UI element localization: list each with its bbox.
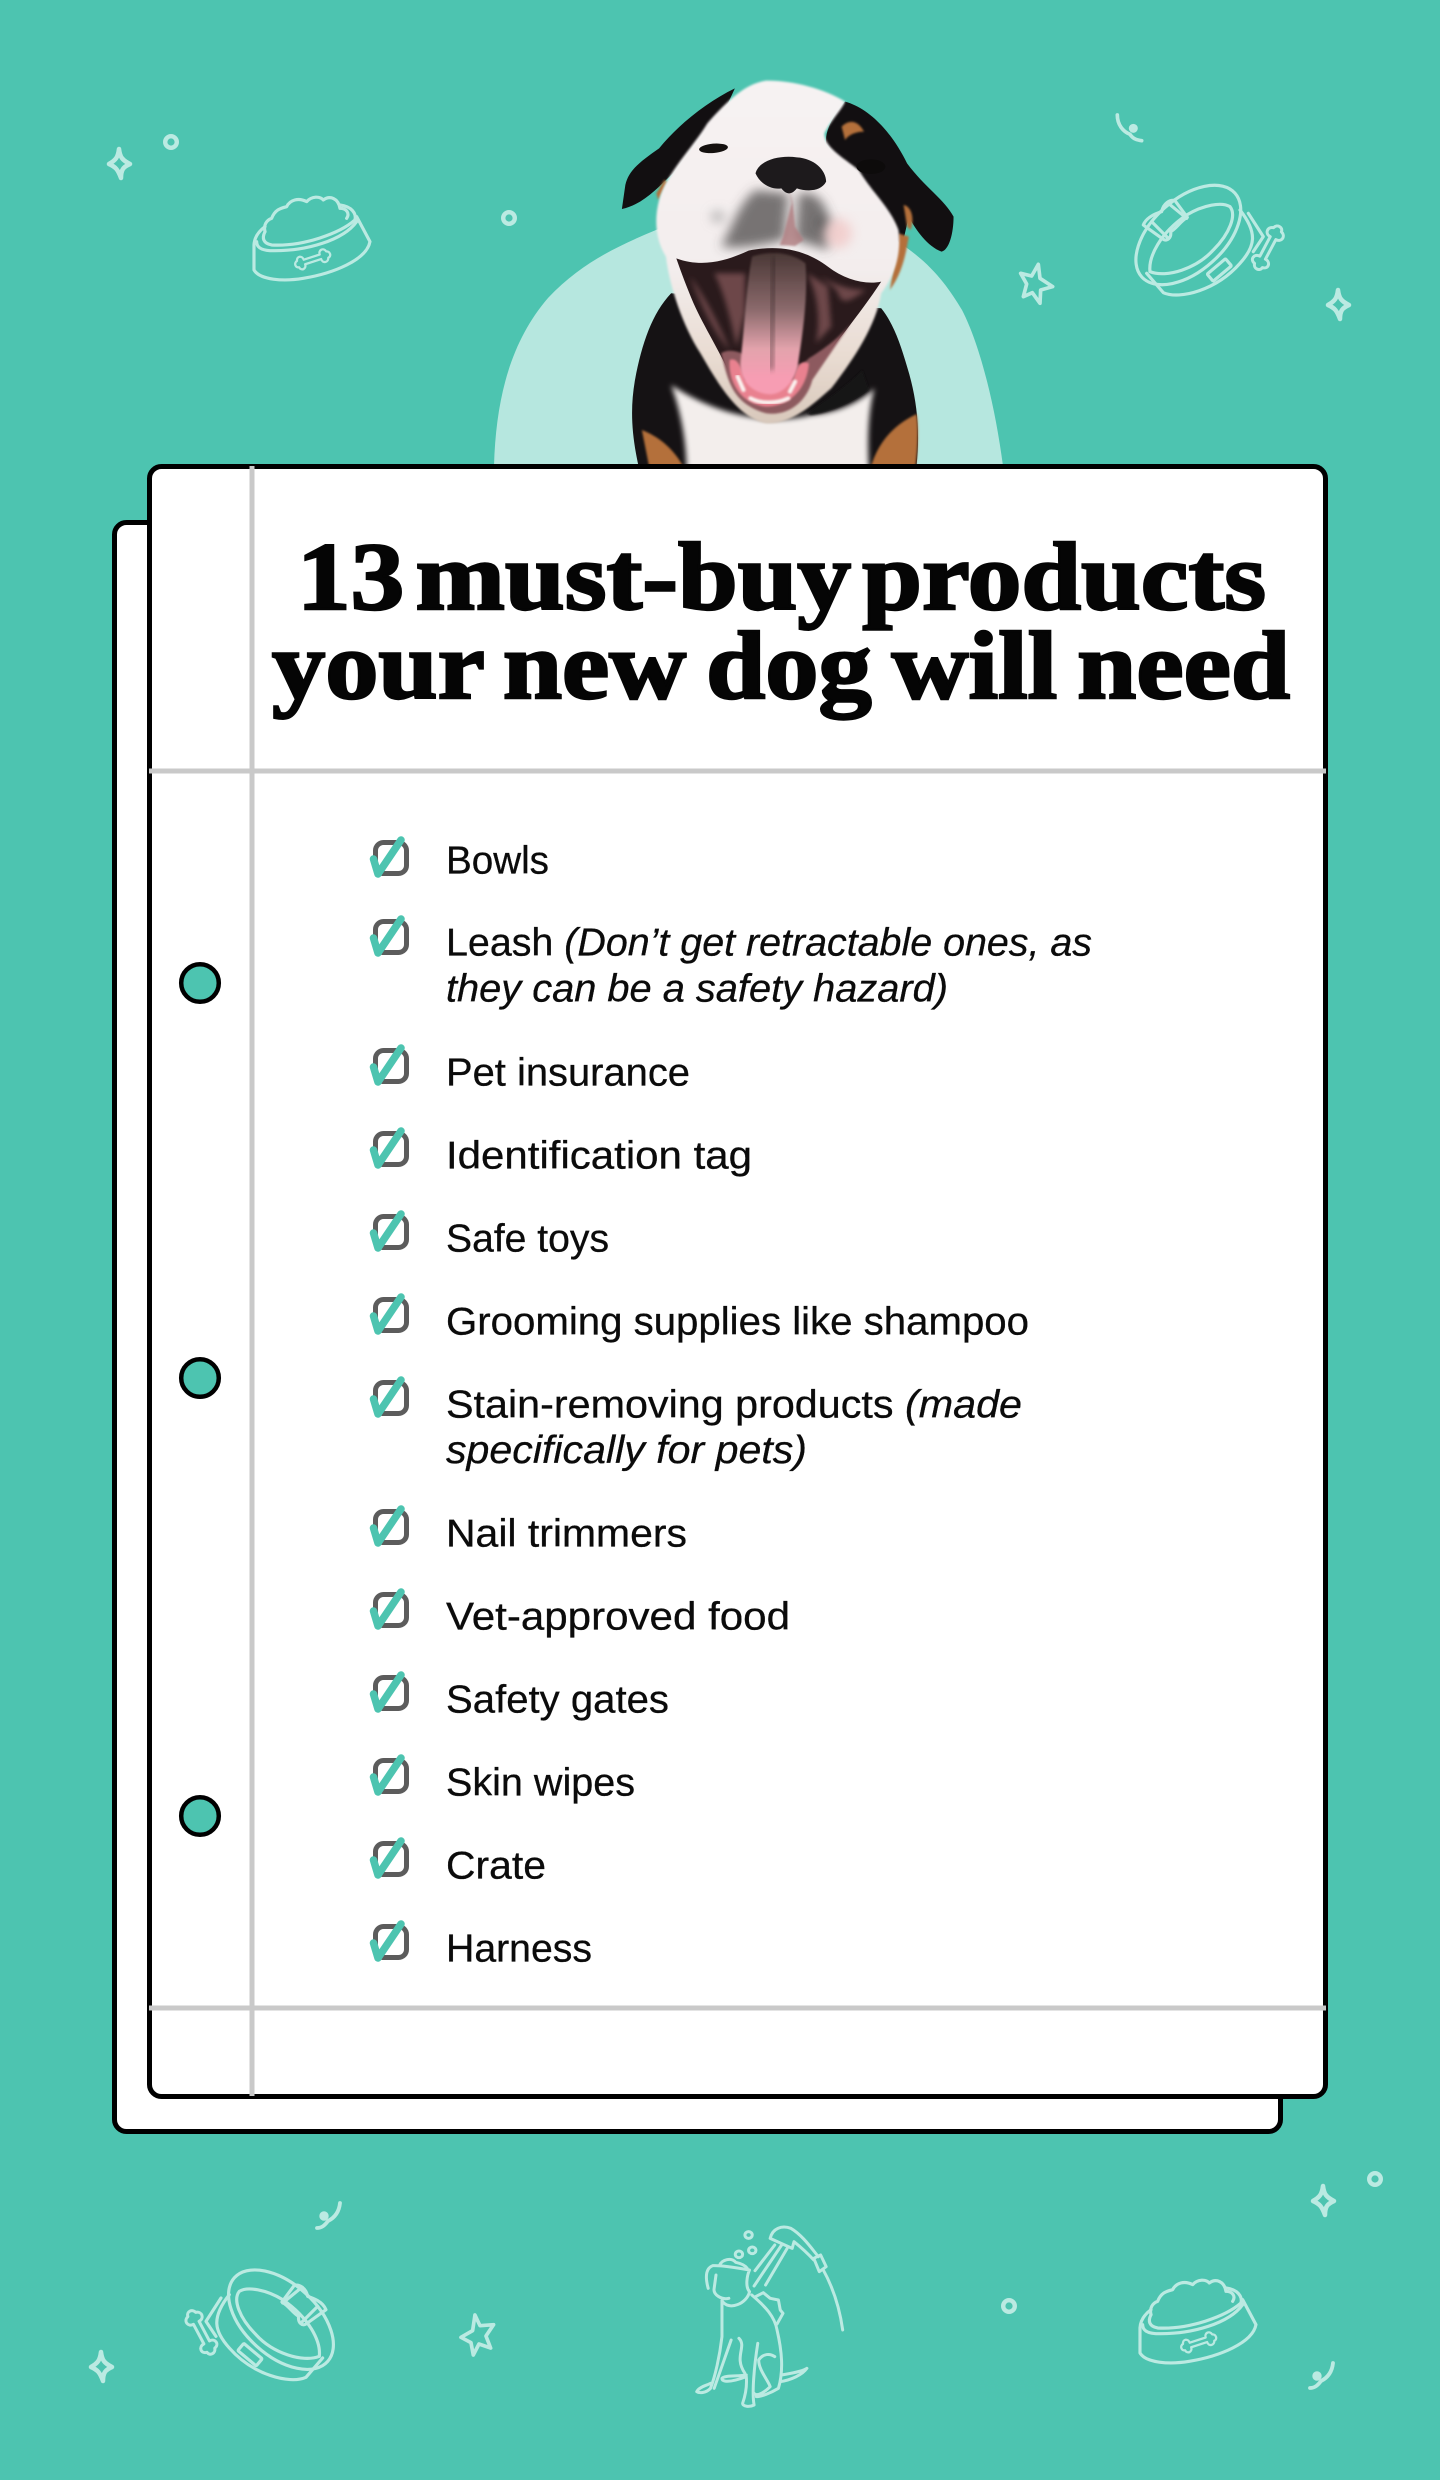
item: Identification tag [374,1131,752,1178]
inner mouth flesh [690,273,866,350]
icon: ring near arch [503,212,515,224]
dog photo illustration [622,81,954,473]
title: 13 must-buy products [297,523,1266,630]
icon: sparkle bottom right [1313,2186,1334,2215]
icon: squiggle bottom left [317,2203,340,2228]
item: Skin wipes [374,1758,635,1804]
tan markings [656,122,912,290]
right ear and eye patch [826,102,954,252]
icon: star top right [1021,264,1053,303]
item: Nail trimmers: Nail trimmers [446,1512,687,1556]
item: Safe toys [374,1214,609,1260]
icon: sparkle top right [1328,290,1349,319]
lower lip and gums [721,317,855,414]
muzzle shading [711,190,832,250]
icon: ring bottom right [1369,2173,1381,2185]
back sheet of paper [114,522,1280,2132]
item: Grooming supplies: Grooming supplies like shampoo [446,1300,1029,1344]
item: Bowls [374,840,549,882]
item: Pet insurance: Pet insurance [446,1052,690,1094]
item: Harness [374,1924,592,1970]
item: Bowls: Bowls [446,840,549,882]
icon: ring top left [165,136,177,148]
checklist [374,840,1092,1970]
front sheet of paper [149,466,1326,2096]
title: your new dog will need [272,612,1290,719]
eyes [699,144,728,154]
item: Identification tag: Identification tag [446,1134,752,1178]
item: Stain-removing products [374,1380,1022,1472]
binder hole 2 [181,1359,219,1397]
item: Leash: they can be a safety hazard) [446,968,948,1010]
pink cheeks [824,218,852,248]
tongue centre line [771,257,774,370]
binder hole 3 [181,1797,219,1835]
open mouth [676,248,882,366]
dog head [656,81,899,423]
arch shape behind dog [494,207,1003,466]
item: Stain-removing products: specifically for pets) [446,1429,807,1472]
nose [756,157,826,193]
item: Skin wipes: Skin wipes [446,1762,635,1804]
icon: dog collar bottom left [182,2251,352,2388]
title [272,523,1290,719]
icon: dog under shower [697,2227,843,2406]
binder hole 1 [181,964,219,1002]
philtrum [780,190,804,246]
item: Pet insurance [374,1048,690,1094]
tan chest patches [640,413,920,464]
dog body [632,293,918,473]
icon: sparkle bottom left [91,2352,112,2381]
collar shadow [807,388,870,416]
item: Crate [374,1841,546,1888]
item: Safety gates: Safety gates [446,1678,669,1722]
icon: food bowl top left [254,197,370,280]
icon: squiggle bottom right [1310,2363,1333,2388]
tongue [740,253,806,394]
icon: food bowl bottom right [1140,2280,1256,2363]
item: Harness: Harness [446,1928,592,1970]
icon: ring bottom middle [1003,2300,1015,2312]
left ear [622,88,735,209]
item: Stain-removing products: Stain-removing products (made [446,1384,1022,1426]
item: Safety gates [374,1675,669,1722]
icon: star bottom left [461,2315,494,2355]
icon: dog collar top right [1118,166,1287,304]
teeth [738,377,795,403]
item: Nail trimmers [374,1509,687,1556]
icon: squiggle top right [1117,115,1142,141]
dog chest [671,385,874,473]
item: Crate: Crate [446,1844,546,1888]
item: Leash [374,919,1092,1010]
item: Leash: Leash (Don’t get retractable ones, as [446,922,1092,964]
icon: sparkle top left [109,149,130,178]
item: Vet-approved food: Vet-approved food [446,1596,790,1638]
item: Safe toys: Safe toys [446,1218,609,1260]
